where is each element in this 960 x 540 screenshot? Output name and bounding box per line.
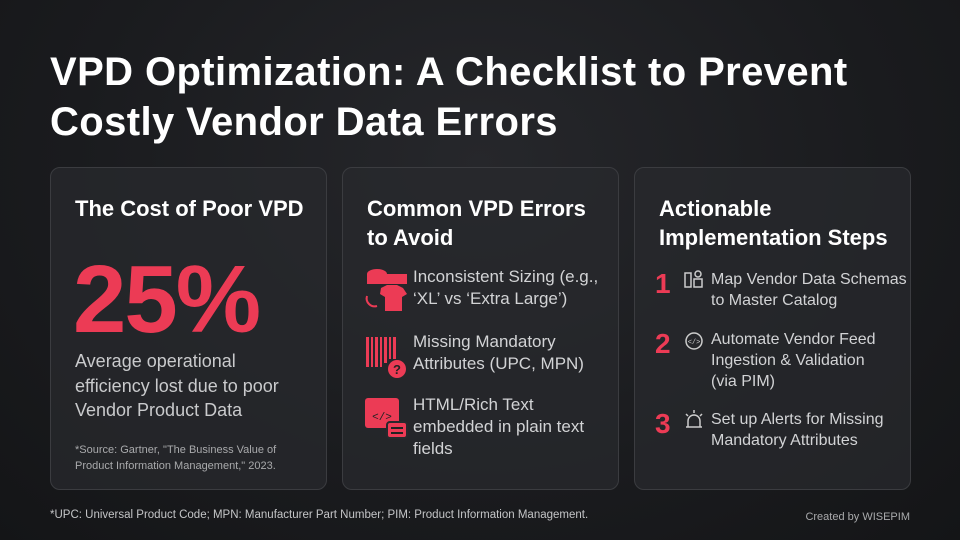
step 2: 2 <box>655 328 671 359</box>
heading: steps: Actionable <box>659 196 771 221</box>
footnote: *UPC: Universal Product Code; MPN: Manufacturer Part Number; PIM: Product Information Management. <box>50 509 588 521</box>
panel: cost <box>50 167 327 490</box>
step 3: Set up Alerts for Missing Mandatory Attributes <box>711 411 884 449</box>
heading: errors: Common VPD Errors <box>367 196 586 221</box>
error item 1: Inconsistent Sizing (e.g., ‘XL’ vs ‘Extra Large’) <box>413 267 598 308</box>
title <box>50 50 848 144</box>
icon: code window <box>365 398 406 437</box>
icon: barcode question <box>366 337 406 378</box>
icon: automation: </> <box>688 339 700 347</box>
icon: alarm <box>686 410 702 428</box>
title: VPD Optimization: A Checklist to Prevent <box>50 50 848 94</box>
panel: errors <box>342 167 619 490</box>
icon: schema <box>684 270 703 288</box>
heading: steps: Implementation Steps <box>659 225 888 250</box>
panel: steps <box>634 167 911 490</box>
heading: steps <box>659 196 888 250</box>
title: Costly Vendor Data Errors <box>50 100 558 144</box>
step 1: Map Vendor Data Schemas to Master Catalog <box>711 271 907 309</box>
heading: cost: The Cost of Poor VPD <box>75 196 304 221</box>
icon: tape and shirt <box>366 269 407 311</box>
icon: automation <box>685 332 703 350</box>
icon: code window: </> <box>372 412 392 424</box>
source: *Source: Gartner, "The Business Value of Product Information Management," 2023. <box>75 444 276 472</box>
step 1: 1 <box>655 268 671 299</box>
big stat: 25% <box>73 246 259 353</box>
step 3: 3 <box>655 408 671 439</box>
icon: barcode question: ? <box>393 362 401 377</box>
step 3 <box>655 408 884 449</box>
error item 2 <box>366 332 584 378</box>
stat description: Average operational efficiency lost due to poor Vendor Product Data <box>75 351 279 420</box>
heading: errors <box>367 196 586 250</box>
credit: Created by WISEPIM <box>805 511 910 523</box>
error item 3: HTML/Rich Text embedded in plain text fields <box>413 395 584 458</box>
heading: errors: to Avoid <box>367 225 453 250</box>
step 2: Automate Vendor Feed Ingestion & Validation (via PIM) <box>711 331 876 390</box>
error item 2: Missing Mandatory Attributes (UPC, MPN) <box>413 332 584 373</box>
